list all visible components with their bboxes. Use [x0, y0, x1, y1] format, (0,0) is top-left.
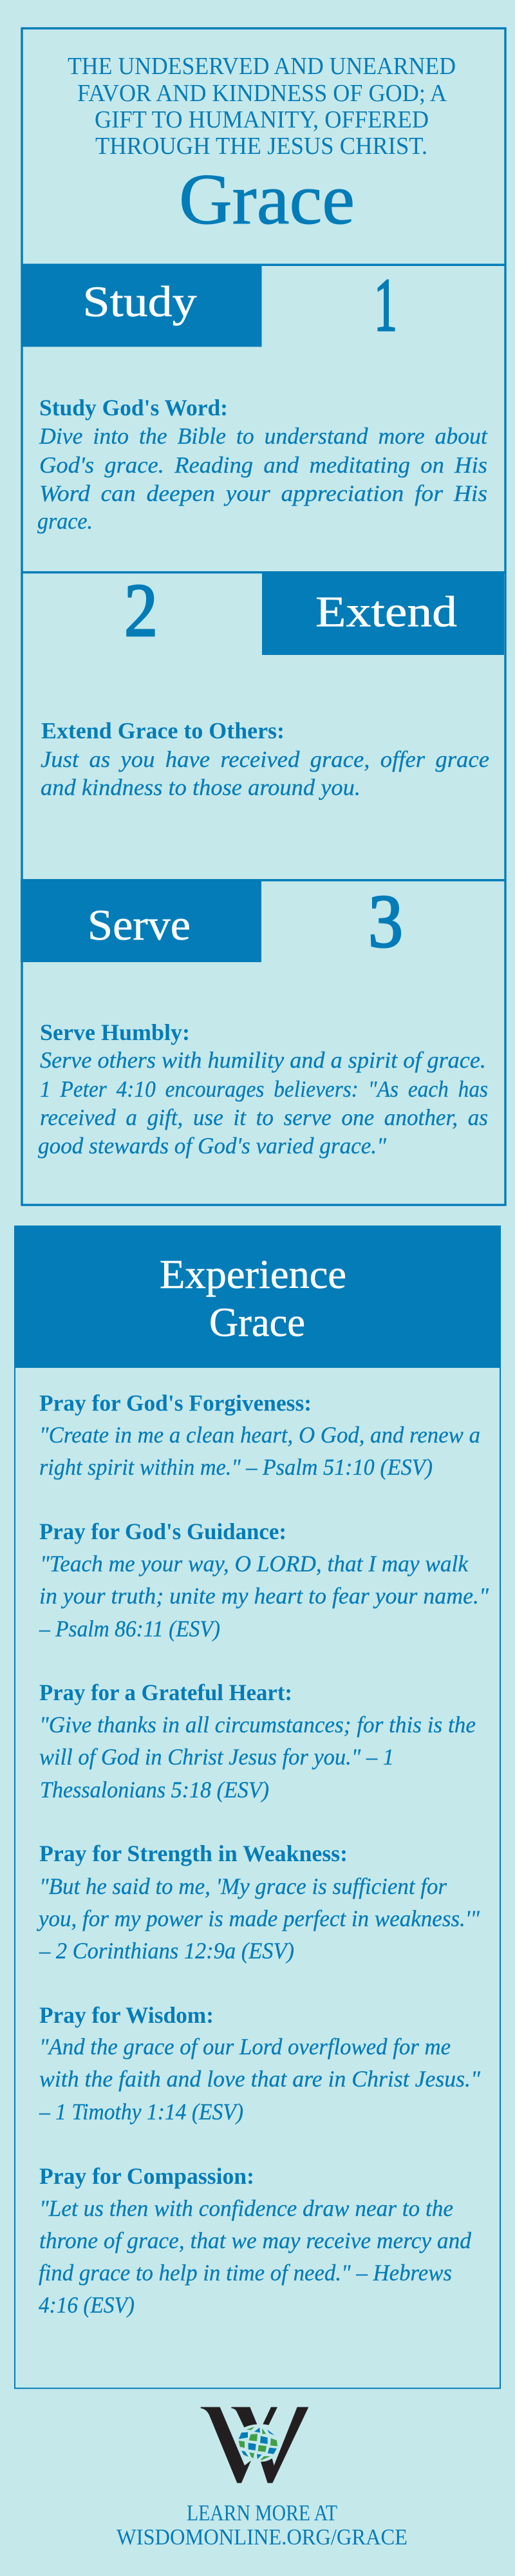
prayer: compassion: "Let us then with confidence draw near to the — [39, 2195, 453, 2221]
panel: step 3 serve — [21, 879, 488, 1159]
prayer: grateful heart: Thessalonians 5:18 (ESV) — [40, 1777, 269, 1803]
prayer: guidance: Pray for God's Guidance: — [39, 1519, 286, 1544]
text block: serve humbly: 1 Peter 4:10 encourages believers: "As each has — [40, 1076, 488, 1102]
definition text: THROUGH THE JESUS CHRIST. — [95, 133, 427, 160]
definition text: FAVOR AND KINDNESS OF GOD; A — [77, 80, 447, 107]
text block: extend grace to others — [41, 717, 489, 800]
definition text: GIFT TO HUMANITY, OFFERED — [95, 106, 429, 133]
prayer: grateful heart: will of God in Christ Jesus for you." – 1 — [39, 1744, 394, 1770]
prayer: grateful heart: "Give thanks in all circumstances; for this is the — [39, 1712, 476, 1738]
text block: serve humbly: Serve others with humility and a spirit of grace. — [40, 1047, 486, 1073]
number 2: 2 — [124, 568, 158, 652]
prayer: strength in weakness: you, for my power is made perfect in weakness.'" — [37, 1906, 480, 1931]
prayer: guidance: – Psalm 86:11 (ESV) — [39, 1616, 220, 1642]
text block: serve humbly — [38, 1019, 488, 1159]
text block: extend grace to others: Just as you have received grace, offer grace — [41, 746, 489, 772]
prayer: compassion — [39, 2163, 472, 2318]
text block: study god's word: Word can deepen your appreciation for His — [39, 480, 487, 506]
banner: study: Study — [82, 277, 197, 326]
banner: serve: Serve — [88, 900, 191, 949]
text block: study god's word: God's grace. Reading and meditating on His — [39, 452, 487, 478]
text block: serve humbly: good stewards of God's varied grace." — [38, 1133, 387, 1159]
text block: extend grace to others: Extend Grace to Others: — [41, 717, 285, 743]
panel: grace steps frame — [21, 28, 505, 1205]
text block: serve humbly: Serve Humbly: — [40, 1019, 190, 1045]
heading banner: experience grace: Grace — [209, 1300, 305, 1345]
prayer: forgiveness: "Create in me a clean heart, O God, and renew a — [39, 1422, 480, 1448]
text block: serve humbly: received a gift, use it to serve one another, as — [40, 1104, 488, 1130]
banner: extend: Extend — [315, 587, 457, 636]
prayer: strength in weakness: "But he said to me, 'My grace is sufficient for — [39, 1873, 447, 1899]
prayer: forgiveness: Pray for God's Forgiveness: — [39, 1390, 312, 1416]
prayer: strength in weakness: – 2 Corinthians 12:9a (ESV) — [39, 1938, 294, 1964]
prayer: guidance: in your truth; unite my heart to fear your name." — [39, 1583, 489, 1609]
banner: serve — [21, 879, 261, 962]
prayer: compassion: 4:16 (ESV) — [39, 2292, 135, 2318]
footer call to action: WISDOMONLINE.ORG/GRACE — [117, 2524, 407, 2550]
prayer: forgiveness: right spirit within me." – Psalm 51:10 (ESV) — [39, 1454, 433, 1480]
definition text — [68, 53, 456, 160]
prayer: wisdom: "And the grace of our Lord overflowed for me — [39, 2034, 451, 2060]
heading banner: experience grace — [14, 1226, 501, 1368]
prayer: guidance — [39, 1519, 489, 1642]
number 3: 3 — [368, 879, 403, 963]
text block: study god's word: Dive into the Bible to understand more about — [39, 423, 488, 449]
title: Grace — [179, 160, 355, 240]
prayer: forgiveness — [39, 1390, 480, 1480]
number 1: 1 — [374, 263, 397, 347]
prayer: wisdom: – 1 Timothy 1:14 (ESV) — [39, 2099, 243, 2125]
panel: step 1 study — [21, 263, 488, 534]
panel: experience grace — [14, 1226, 501, 2388]
prayer: wisdom: with the faith and love that are in Christ Jesus." — [39, 2066, 481, 2092]
prayer: compassion: Pray for Compassion: — [39, 2163, 254, 2189]
text block: study god's word: grace. — [37, 508, 93, 534]
heading banner: experience grace: Experience — [160, 1251, 346, 1297]
prayer: wisdom: Pray for Wisdom: — [39, 2002, 214, 2028]
prayer: compassion: throne of grace, that we may receive mercy and — [39, 2228, 472, 2253]
text block: extend grace to others: and kindness to those around you. — [41, 774, 360, 800]
prayer: strength in weakness: Pray for Strength in Weakness: — [39, 1841, 348, 1866]
prayer: compassion: find grace to help in time of need." – Hebrews — [39, 2260, 452, 2286]
prayer: grateful heart — [39, 1680, 476, 1803]
prayer: guidance: "Teach me your way, O LORD, that I may walk — [40, 1551, 469, 1577]
panel: step 2 extend — [41, 568, 504, 800]
prayer: strength in weakness — [37, 1841, 480, 1964]
banner: extend — [262, 572, 504, 655]
icon: wisdom online logo — [201, 2407, 308, 2483]
prayer: grateful heart: Pray for a Grateful Heart: — [39, 1680, 292, 1705]
definition text: THE UNDESERVED AND UNEARNED — [68, 53, 456, 80]
prayer: wisdom — [39, 2002, 481, 2125]
text block: study god's word — [37, 395, 488, 534]
text block: study god's word: Study God's Word: — [39, 395, 228, 421]
banner: study — [21, 264, 261, 346]
footer call to action — [117, 2500, 407, 2550]
footer call to action: LEARN MORE AT — [187, 2500, 337, 2526]
